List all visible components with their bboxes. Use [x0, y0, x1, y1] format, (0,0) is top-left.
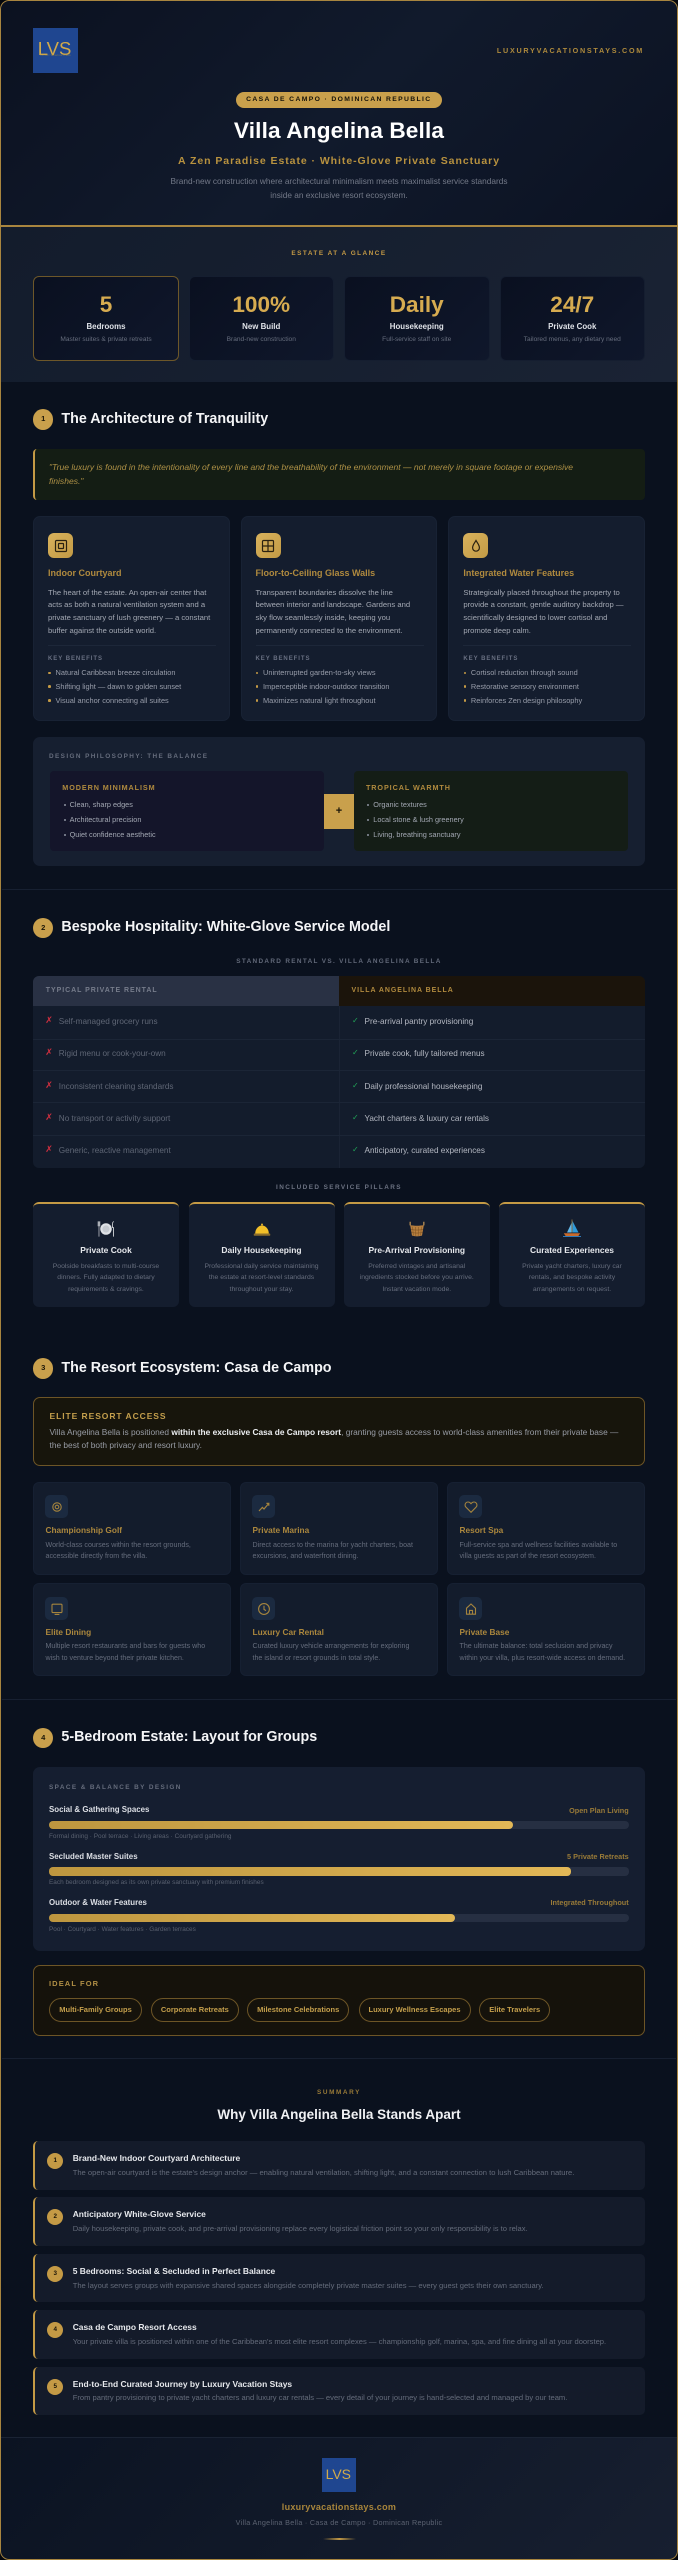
pillar: pre-arrival provisioning: [344, 1202, 490, 1307]
ideal for heading: IDEAL FOR: [49, 1979, 99, 1988]
stat: bedrooms: Master suites & private retreats: [60, 336, 152, 343]
key benefits: KEY BENEFITS: [463, 656, 518, 662]
amenity: resort spa: Resort Spa: [460, 1525, 503, 1535]
bar: secluded master suites: Each bedroom designed as its own private sanctuary with premium finishes: [49, 1879, 264, 1886]
comparison table: [33, 976, 645, 1168]
panel: design philosophy: [33, 737, 645, 866]
section 2 heading: Bespoke Hospitality: White-Glove Service Model: [61, 919, 390, 935]
amenity: championship golf: accessible directly from the villa.: [46, 1552, 147, 1560]
footer location: Villa Angelina Bella · Casa de Campo · Dominican Republic: [236, 2518, 442, 2527]
summary item 2: 2: [54, 2213, 57, 2220]
quote callout: [33, 449, 645, 500]
box: modern minimalism: MODERN MINIMALISM: [62, 783, 156, 792]
stat: bedrooms: Bedrooms: [86, 322, 126, 331]
bar: outdoor and water: Integrated Throughout: [550, 1898, 629, 1907]
card body: acts as both a natural ventilation system and a: [48, 600, 205, 609]
villa angelina bella rows: ✓: [352, 1113, 359, 1122]
key benefits: Restorative sensory environment: [471, 682, 579, 691]
amenity: luxury car rental: Luxury Car Rental: [252, 1627, 324, 1637]
table header: villa angelina bella: [339, 976, 645, 1006]
panel: space and balance chart: [33, 1767, 645, 1951]
card body: provide a constant, gentle auditory backdrop —: [463, 600, 624, 609]
key benefits: Maximizes natural light throughout: [263, 696, 376, 705]
location pill: CASA DE CAMPO · DOMINICAN REPUBLIC: [246, 96, 432, 102]
table header: typical rental: TYPICAL PRIVATE RENTAL: [46, 987, 158, 994]
card body: private sanctuary of lush greenery — a constant: [48, 613, 210, 622]
key benefits: Reinforces Zen design philosophy: [471, 696, 582, 705]
pillar: private cook: Poolside breakfasts to multi-course: [53, 1263, 159, 1270]
pillar: pre-arrival provisioning: Preferred vintages and artisanal: [368, 1263, 465, 1270]
villa angelina bella rows: Yacht charters & luxury car rentals: [364, 1114, 489, 1123]
typical rental rows: ✗: [45, 1048, 53, 1058]
icon: screen: [45, 1597, 68, 1620]
typical rental rows: Inconsistent cleaning standards: [59, 1082, 174, 1091]
icon: clock: [252, 1597, 274, 1620]
stat: housekeeping: Daily: [390, 292, 444, 317]
typical rental rows: No transport or activity support: [59, 1114, 170, 1123]
bar: outdoor and water: Outdoor & Water Features: [49, 1898, 147, 1907]
icon: water drop: [463, 533, 488, 558]
amenity: private base: Private Base: [460, 1627, 509, 1637]
section 1 heading: The Architecture of Tranquility: [61, 411, 268, 427]
typical rental rows: ✗: [45, 1016, 53, 1026]
typical rental rows: Generic, reactive management: [59, 1146, 171, 1155]
icon: trend line: [252, 1495, 274, 1518]
key benefits: Uninterrupted garden-to-sky views: [263, 668, 376, 677]
amenity: championship golf: World-class courses within the resort grounds,: [46, 1541, 191, 1549]
logo: LUXURY VACATION STAYS: [40, 55, 71, 57]
summary item 5: End-to-End Curated Journey by Luxury Vacation Stays: [73, 2379, 292, 2389]
card title: Indoor Courtyard: [48, 568, 122, 578]
plus connector: [324, 794, 354, 829]
summary item 1: 1: [54, 2157, 57, 2164]
hero header: [0, 0, 678, 227]
amenity: elite dining: [33, 1583, 231, 1676]
section 2 number: [33, 918, 53, 938]
summary item 2: Anticipatory White-Glove Service: [73, 2209, 206, 2219]
icon: heart: [459, 1495, 482, 1518]
pillar: daily housekeeping: Daily Housekeeping: [221, 1245, 302, 1255]
amenity: private marina: Private Marina: [252, 1525, 309, 1535]
summary item 3: [33, 2254, 645, 2302]
card body: Transparent boundaries dissolve the line: [256, 588, 393, 597]
villa angelina bella rows: Pre-arrival pantry provisioning: [364, 1017, 473, 1026]
stat: private cook: Tailored menus, any dietary need: [524, 336, 621, 343]
villa angelina bella rows: ✓: [352, 1048, 359, 1057]
bar: outdoor and water: [49, 1898, 629, 1933]
stat: bedrooms: 5: [100, 292, 112, 317]
stat: housekeeping: Housekeeping: [390, 322, 444, 331]
stat: new build: [188, 276, 334, 361]
summary item 2: Daily housekeeping, private cook, and pre-arrival provisioning replace every logistical friction point so your only responsibility is to relax.: [73, 2224, 528, 2233]
title: Villa Angelina Bella: [234, 118, 444, 143]
key benefits: Natural Caribbean breeze circulation: [56, 668, 175, 677]
summary eyebrow: SUMMARY: [317, 2089, 361, 2096]
panel: ideal for: [33, 1965, 645, 2036]
summary heading: Why Villa Angelina Bella Stands Apart: [217, 2107, 461, 2122]
icon: basket: [410, 1222, 424, 1236]
card body: [463, 588, 624, 635]
stat: new build: Brand-new construction: [227, 336, 296, 343]
table header: typical rental: [33, 976, 339, 1006]
amenity: championship golf: Championship Golf: [46, 1525, 122, 1535]
stat: new build: 100%: [232, 292, 290, 317]
bar: secluded master suites: 5 Private Retreats: [567, 1852, 629, 1861]
typical rental rows: ✗: [45, 1145, 53, 1155]
footer accent line: [323, 2538, 356, 2540]
pillar: daily housekeeping: throughout your stay.: [230, 1286, 293, 1292]
footer website: luxuryvacationstays.com: [282, 2502, 396, 2512]
amenity: resort spa: villa guests as part of the resort ecosystem.: [460, 1552, 596, 1560]
tag: elite travelers: [479, 1998, 550, 2022]
quote callout: "True luxury is found in the intentionality of every line and the breathability of the environment — not merely in square footage or expensive: [49, 462, 573, 472]
bar: social and gathering: [49, 1805, 629, 1840]
service pillars label: INCLUDED SERVICE PILLARS: [276, 1184, 402, 1191]
pillar: pre-arrival provisioning: ingredients stocked before you arrive.: [360, 1274, 474, 1281]
description: [170, 176, 508, 200]
summary item 3: 3: [54, 2270, 57, 2277]
card body: sky flow seamlessly inside, keeping you: [256, 613, 390, 622]
quote callout: finishes.": [49, 476, 83, 486]
amenity: resort spa: Full-service spa and wellness facilities available to: [460, 1541, 617, 1549]
elite resort access callout: the best of both privacy and resort luxury.: [50, 1440, 202, 1450]
panel: indoor courtyard: [33, 516, 230, 721]
location pill: [236, 92, 442, 108]
stat: housekeeping: Full-service staff on site: [382, 336, 451, 343]
plus connector: +: [336, 805, 342, 817]
pillar: daily housekeeping: the estate at resort-level standards: [209, 1274, 314, 1281]
stat: housekeeping: [344, 276, 490, 361]
pillar: daily housekeeping: Professional daily service maintaining: [204, 1263, 319, 1270]
panel: glass walls: [240, 516, 437, 721]
summary item 5: 5: [54, 2383, 57, 2390]
bar: secluded master suites: Secluded Master Suites: [49, 1852, 138, 1861]
summary item 4: 4: [54, 2326, 57, 2333]
icon: window: [256, 533, 280, 558]
villa angelina bella rows: [352, 1016, 489, 1155]
card title: Floor-to-Ceiling Glass Walls: [256, 568, 375, 578]
amenity: elite dining: Multiple resort restaurants and bars for guests who: [46, 1642, 205, 1650]
summary item 5: From pantry provisioning to private yacht charters and luxury car rentals — every detail of your journey is hand-selected and managed by our team.: [73, 2393, 567, 2402]
section 4 number: [33, 1728, 53, 1748]
stat: private cook: 24/7: [550, 292, 594, 317]
card body: [48, 588, 210, 635]
pillar: daily housekeeping: [188, 1202, 334, 1307]
icon: plate and cutlery: [98, 1221, 114, 1237]
card body: [256, 588, 410, 635]
tag: milestone celebrations: [247, 1998, 349, 2022]
villa angelina bella rows: ✓: [352, 1016, 359, 1025]
tag: corporate retreats: [151, 1998, 239, 2022]
pillar: pre-arrival provisioning: Pre-Arrival Provisioning: [368, 1245, 465, 1255]
box: modern minimalism: Quiet confidence aesthetic: [70, 830, 156, 839]
amenity: resort spa: [447, 1482, 645, 1575]
box: tropical warmth: TROPICAL WARMTH: [366, 783, 451, 792]
key benefits: [48, 656, 182, 705]
stat: bedrooms: [33, 276, 179, 361]
pillar: private cook: Private Cook: [80, 1245, 132, 1255]
box: tropical warmth: Local stone & lush greenery: [373, 815, 464, 824]
pillar: curated experiences: arrangements on request.: [533, 1286, 611, 1292]
stat: private cook: Private Cook: [548, 322, 596, 331]
card title: Integrated Water Features: [463, 568, 574, 578]
icon: courtyard: [48, 533, 73, 558]
section 4 number: 4: [41, 1733, 45, 1742]
heading: estate at a glance: ESTATE AT A GLANCE: [291, 250, 387, 257]
amenity: private base: [447, 1583, 645, 1676]
villa angelina bella rows: Private cook, fully tailored menus: [364, 1049, 485, 1058]
comparison label: STANDARD RENTAL VS. VILLA ANGELINA BELLA: [236, 958, 442, 965]
tag: multi-family groups: [49, 1998, 142, 2022]
elite resort access callout: ELITE RESORT ACCESS: [50, 1411, 167, 1421]
section 3 number: 3: [41, 1363, 45, 1372]
typical rental rows: Rigid menu or cook-your-own: [59, 1049, 166, 1058]
design philosophy heading: DESIGN PHILOSOPHY: THE BALANCE: [49, 753, 208, 760]
amenity: luxury car rental: Curated luxury vehicle arrangements for exploring: [252, 1642, 409, 1650]
bar: secluded master suites: [49, 1852, 629, 1886]
pillar: private cook: requirements & cravings.: [68, 1286, 144, 1292]
bar: outdoor and water: Pool · Courtyard · Water features · Garden terraces: [49, 1926, 196, 1933]
amenity: luxury car rental: the island or resort grounds in total style.: [252, 1654, 380, 1662]
pillar: curated experiences: rentals, and bespoke activity: [529, 1274, 615, 1281]
footer logo: [322, 2458, 356, 2492]
section 2 number: 2: [41, 923, 45, 932]
summary item 3: The layout serves groups with expansive shared spaces alongside completely private master suites — every guest gets their own sanctuary.: [73, 2281, 544, 2290]
typical rental rows: [45, 1016, 174, 1155]
key benefits: [256, 656, 390, 705]
key benefits: Cortisol reduction through sound: [471, 668, 578, 677]
section 1 number: [33, 409, 53, 430]
card body: buffer against the outside world.: [48, 626, 156, 635]
panel: water features: [448, 516, 645, 721]
card body: permanently connected to the environment.: [256, 626, 402, 635]
amenity: championship golf: [33, 1482, 231, 1575]
pillar: curated experiences: Curated Experiences: [530, 1245, 614, 1255]
card body: The heart of the estate. An open-air center that: [48, 588, 206, 597]
card body: scientifically designed to lower cortisol and: [463, 613, 607, 622]
chart heading: SPACE & BALANCE BY DESIGN: [49, 1784, 182, 1791]
section 1 number: 1: [41, 414, 45, 423]
bar: social and gathering: Social & Gathering Spaces: [49, 1805, 149, 1814]
key benefits: [463, 656, 582, 705]
pillar: curated experiences: Private yacht charters, luxury car: [522, 1263, 622, 1270]
box: modern minimalism: Clean, sharp edges: [70, 800, 133, 809]
amenity: private marina: excursions, and waterfront dining.: [252, 1552, 359, 1560]
typical rental rows: ✗: [45, 1081, 53, 1091]
box: tropical warmth: [354, 771, 628, 851]
stat: new build: New Build: [242, 322, 280, 331]
logo: [33, 28, 78, 73]
box: tropical warmth: Organic textures: [373, 800, 427, 809]
summary item 1: [33, 2141, 645, 2190]
box: modern minimalism: [50, 771, 324, 851]
typical rental rows: ✗: [45, 1113, 53, 1123]
section 3 number: [33, 1358, 53, 1379]
summary item 1: The open-air courtyard is the estate's design anchor — enabling natural ventilation, shifting light, and a constant connection to lush Caribbean nature.: [73, 2168, 574, 2177]
tag: luxury wellness escapes: [358, 1998, 470, 2022]
tag: multi-family groups: Multi-Family Groups: [59, 2005, 132, 2014]
villa angelina bella rows: Anticipatory, curated experiences: [364, 1146, 485, 1155]
key benefits: KEY BENEFITS: [256, 656, 310, 662]
subtitle: A Zen Paradise Estate · White-Glove Private Sanctuary: [178, 155, 500, 167]
summary item 2: [33, 2197, 645, 2246]
tag: milestone celebrations: Milestone Celebrations: [257, 2005, 339, 2014]
villa angelina bella rows: ✓: [352, 1145, 359, 1154]
amenity: private marina: Direct access to the marina for yacht charters, boat: [252, 1541, 413, 1549]
section 3 heading: The Resort Ecosystem: Casa de Campo: [61, 1360, 332, 1376]
table header: villa angelina bella: VILLA ANGELINA BELLA: [352, 987, 454, 994]
summary item 5: [33, 2367, 645, 2415]
tag: luxury wellness escapes: Luxury Wellness Escapes: [368, 2005, 460, 2014]
summary item 4: Your private villa is positioned within one of the Caribbean's most elite resort complexes — championship golf, marina, spa, and fine dining all at your doorstep.: [73, 2337, 606, 2346]
elite resort access callout: Villa Angelina Bella is positioned within the exclusive Casa de Campo resort, granting guests access to world-class amenities from their private base —: [50, 1427, 618, 1437]
amenity: elite dining: wish to venture beyond their private kitchen.: [46, 1654, 184, 1662]
amenity: elite dining: Elite Dining: [46, 1627, 91, 1637]
box: modern minimalism: Architectural precision: [70, 815, 141, 824]
description: Brand-new construction where architectural minimalism meets maximalist service standards: [170, 176, 508, 186]
icon: service bell: [254, 1224, 270, 1236]
tag: elite travelers: Elite Travelers: [489, 2005, 540, 2014]
amenity: private base: The ultimate balance: total seclusion and privacy: [460, 1642, 612, 1650]
pillar: private cook: dinners. Fully adapted to dietary: [57, 1274, 155, 1281]
villa angelina bella rows: Daily professional housekeeping: [364, 1082, 482, 1091]
description: inside an exclusive resort ecosystem.: [270, 190, 408, 200]
amenity: luxury car rental: [240, 1583, 438, 1676]
key benefits: KEY BENEFITS: [48, 656, 103, 662]
icon: house: [459, 1597, 482, 1620]
tag: corporate retreats: Corporate Retreats: [161, 2005, 229, 2014]
card body: promote deep calm.: [463, 626, 531, 635]
amenity: private marina: [240, 1482, 438, 1575]
key benefits: Shifting light — dawn to golden sunset: [56, 682, 181, 691]
section 4 heading: 5-Bedroom Estate: Layout for Groups: [61, 1729, 317, 1745]
footer logo: LVS: [326, 2466, 351, 2482]
key benefits: Visual anchor connecting all suites: [56, 696, 169, 705]
card body: between interior and landscape. Gardens and: [256, 600, 410, 609]
typical rental rows: Self-managed grocery runs: [59, 1017, 158, 1026]
amenity: private base: within your villa, plus resort-wide access on demand.: [460, 1654, 625, 1662]
summary item 4: [33, 2310, 645, 2359]
pillar: private cook: [33, 1202, 179, 1307]
elite resort access callout: [33, 1397, 645, 1466]
bar: social and gathering: Open Plan Living: [569, 1806, 629, 1815]
footer: [0, 2437, 678, 2560]
icon: sailboat: [563, 1220, 581, 1237]
summary item 4: Casa de Campo Resort Access: [73, 2322, 197, 2332]
bar: social and gathering: Formal dining · Pool terrace · Living areas · Courtyard gathering: [49, 1833, 231, 1840]
summary item 3: 5 Bedrooms: Social & Secluded in Perfect Balance: [73, 2266, 275, 2276]
icon: golf target: [45, 1495, 68, 1518]
villa angelina bella rows: ✓: [352, 1081, 359, 1090]
stat: private cook: [500, 276, 644, 361]
pillar: curated experiences: [499, 1202, 645, 1307]
website label: LUXURYVACATIONSTAYS.COM: [497, 46, 644, 55]
panel: estate at a glance: [0, 227, 678, 382]
key benefits: Imperceptible indoor-outdoor transition: [263, 682, 390, 691]
box: tropical warmth: Living, breathing sanctuary: [373, 830, 460, 839]
card body: Strategically placed throughout the property to: [463, 588, 620, 597]
pillar: pre-arrival provisioning: Instant vacation mode.: [382, 1286, 451, 1292]
logo: LVS: [38, 38, 71, 59]
summary item 1: Brand-New Indoor Courtyard Architecture: [73, 2153, 240, 2163]
